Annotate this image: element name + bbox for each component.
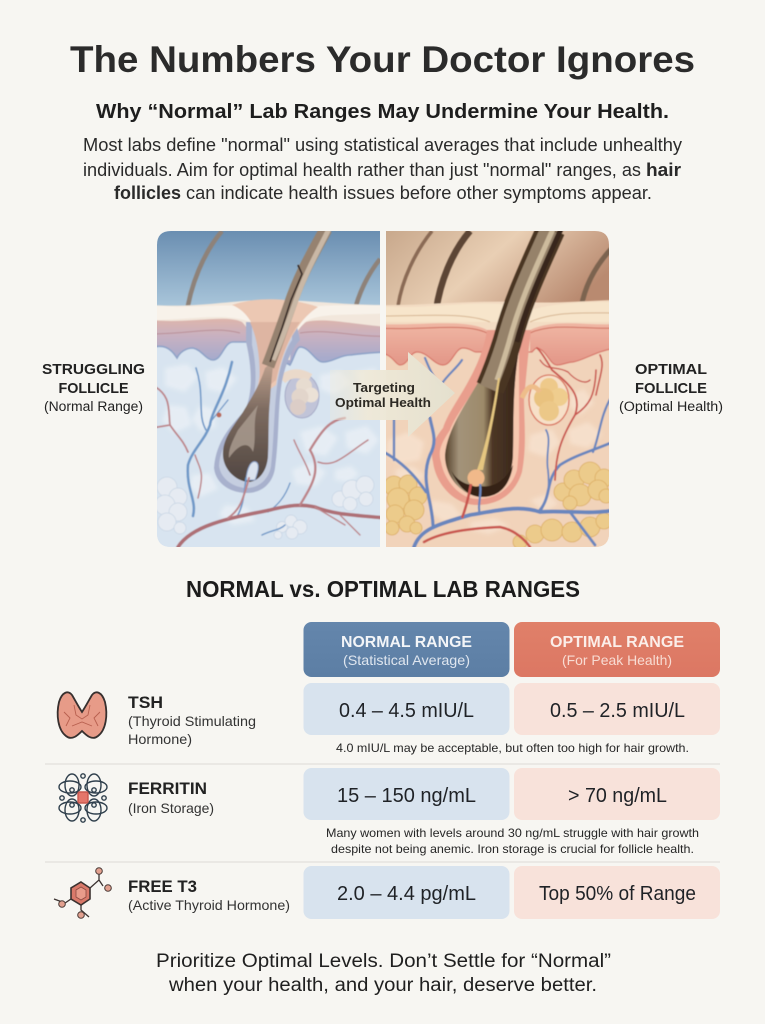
section heading: NORMAL vs. OPTIMAL LAB RANGES (186, 576, 580, 602)
value: TSH normal: 0.4 – 4.5 mIU/L (339, 700, 474, 722)
value: ferritin optimal: > 70 ng/mL (568, 785, 667, 807)
hair shaft (490, 229, 551, 388)
hair bulb (445, 345, 520, 497)
row: ferritin (59, 768, 720, 856)
note: TSH: 4.0 mIU/L may be acceptable, but often too high for hair growth. (336, 741, 689, 755)
follicle sheath (432, 330, 531, 505)
header: optimal range: OPTIMAL RANGE (550, 634, 684, 651)
arrow: targeting optimal health: Optimal Health (335, 395, 431, 410)
golden streak (477, 378, 500, 470)
hair shaft, damaged (268, 229, 326, 366)
dermis (150, 342, 390, 555)
header: normal range (304, 622, 510, 677)
intro paragraph: follicles (114, 183, 181, 203)
intro paragraph: Most labs define "normal" using statistical averages that include unhealthy (83, 135, 682, 155)
follicle sheath (214, 322, 300, 493)
value: free T3 normal: 2.0 – 4.4 pg/mL (337, 883, 476, 905)
illustration: struggling follicle (150, 229, 390, 555)
value: ferritin normal (304, 768, 510, 820)
label: free T3 (128, 878, 290, 913)
note: ferritin: Many women with levels around 30 ng/mL struggle with hair growth (326, 826, 699, 840)
intro paragraph (83, 135, 682, 203)
value: TSH normal (304, 683, 510, 735)
label: TSH (128, 694, 256, 747)
icon: thyroid (58, 692, 106, 738)
intro paragraph: can indicate health issues before other symptoms appear. (186, 183, 652, 203)
dermis texture (162, 364, 381, 525)
dermis (386, 347, 609, 547)
label: struggling follicle: (Normal Range) (44, 399, 143, 414)
label: ferritin (128, 780, 214, 816)
veins: red (152, 385, 385, 547)
arrow: targeting optimal health: Targeting (353, 380, 415, 395)
value: free T3 optimal (514, 866, 720, 919)
header: normal range: (Statistical Average) (343, 652, 470, 668)
veins: blue (188, 362, 290, 535)
fat lobules (155, 476, 374, 539)
label: free T3: (Active Thyroid Hormone) (128, 897, 290, 913)
note: ferritin: despite not being anemic. Iron storage is crucial for follicle health. (331, 842, 694, 856)
icon: ferritin molecule (59, 774, 107, 822)
label: TSH: (Thyroid Stimulating (128, 713, 256, 729)
label: optimal follicle: (Optimal Health) (619, 399, 723, 414)
pink band (386, 323, 609, 365)
closing statement: Prioritize Optimal Levels. Don’t Settle for “Normal” (156, 951, 611, 972)
header: normal range: NORMAL RANGE (341, 634, 472, 651)
header: optimal range (514, 622, 720, 677)
value: ferritin optimal (514, 768, 720, 820)
label: struggling follicle: STRUGGLING (42, 361, 145, 378)
header: optimal range: (For Peak Health) (562, 652, 672, 668)
value: ferritin normal: 15 – 150 ng/mL (337, 785, 476, 807)
subtitle: Why “Normal” Lab Ranges May Undermine Your Health. (96, 101, 669, 123)
value: TSH optimal (514, 683, 720, 735)
sebaceous gland (529, 375, 569, 425)
pink neck (232, 298, 318, 388)
label: optimal follicle (619, 361, 723, 414)
papilla (468, 470, 484, 486)
label: TSH: Hormone) (128, 731, 192, 747)
row: free T3 (54, 866, 720, 919)
sebaceous gland (285, 374, 319, 418)
closing statement (156, 951, 611, 996)
veins: blue (380, 358, 615, 547)
label: optimal follicle: FOLLICLE (635, 380, 707, 397)
value: free T3 normal (304, 866, 510, 919)
title: The Numbers Your Doctor Ignores (70, 39, 695, 80)
arrow: targeting optimal health (330, 352, 455, 437)
note: ferritin (326, 826, 699, 856)
row: TSH (58, 683, 720, 755)
intro paragraph: individuals. Aim for optimal health rather than just "normal" ranges, as (83, 160, 641, 180)
value: free T3 optimal: Top 50% of Range (539, 883, 696, 905)
intro paragraph: hair (646, 160, 681, 180)
label: free T3: FREE T3 (128, 878, 197, 896)
label: optimal follicle: OPTIMAL (635, 361, 707, 378)
label: ferritin: (Iron Storage) (128, 800, 214, 816)
label: struggling follicle (42, 361, 145, 414)
closing statement: when your health, and your hair, deserve better. (168, 975, 597, 996)
label: struggling follicle: FOLLICLE (58, 380, 128, 397)
fat lobules (384, 462, 613, 549)
label: ferritin: FERRITIN (128, 780, 207, 798)
dermis texture (386, 390, 598, 534)
value: TSH optimal: 0.5 – 2.5 mIU/L (550, 700, 685, 722)
hair bulb (223, 360, 274, 482)
veins: red (424, 348, 602, 547)
icon: free T3 molecule (54, 868, 111, 918)
label: TSH: TSH (128, 694, 163, 712)
illustration: optimal follicle (378, 229, 618, 555)
